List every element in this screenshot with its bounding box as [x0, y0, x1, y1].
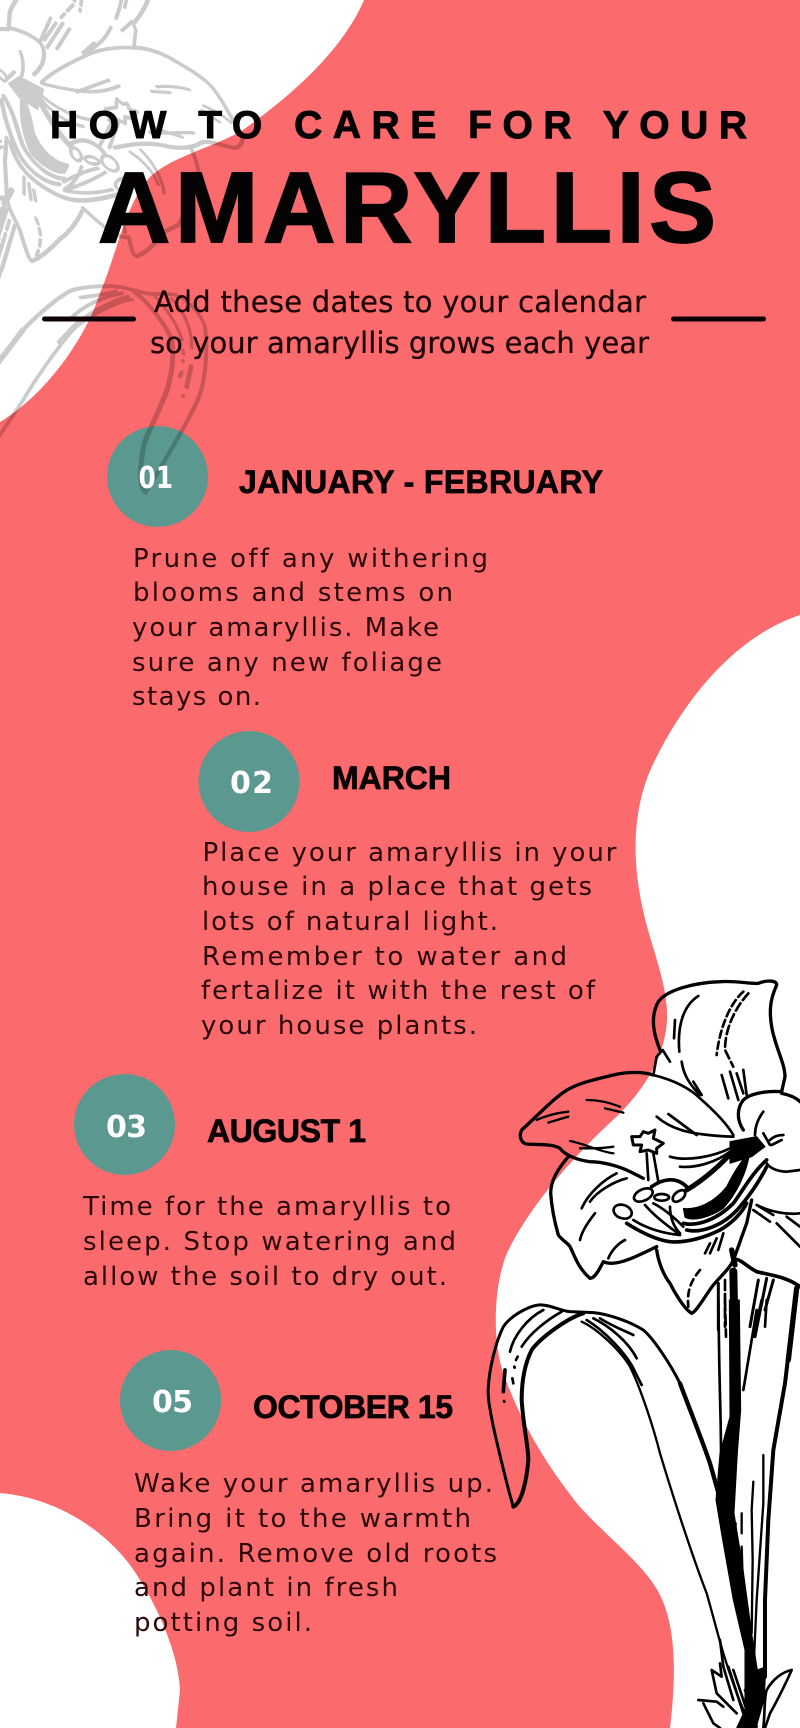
step 03 body: sleep. Stop watering and: [83, 1227, 456, 1257]
step 02 body: fertalize it with the rest of: [201, 976, 596, 1006]
step 03 number: 03: [106, 1110, 147, 1145]
subtitle: so your amaryllis grows each year: [150, 326, 649, 360]
subtitle rule right: [671, 316, 766, 322]
step 02 body: your house plants.: [201, 1011, 477, 1041]
step 05 badge circle: [120, 1350, 221, 1451]
step 01 badge circle: [107, 426, 208, 527]
white blob: right side: [496, 615, 800, 1728]
step 01 body: stays on.: [132, 682, 261, 712]
subtitle: Add these dates to your calendar: [154, 285, 646, 319]
step 01 body: [132, 544, 488, 712]
step 01 heading: JANUARY - FEBRUARY: [239, 464, 603, 500]
white blob: bottom left: [0, 1493, 180, 1728]
step 02 body: Remember to water and: [202, 942, 567, 972]
step 05 heading: OCTOBER 15: [253, 1389, 453, 1425]
step 02 number: 02: [230, 766, 273, 801]
subtitle: [150, 285, 649, 360]
step 05 body: Bring it to the warmth: [134, 1504, 471, 1534]
step 02 body: lots of natural light.: [202, 907, 498, 937]
icon: faded amaryllis line drawing, top left: [0, 0, 316, 708]
step 03 body: allow the soil to dry out.: [83, 1262, 447, 1292]
icon: amaryllis line drawing, lower right: [488, 981, 800, 1728]
subtitle rule left: [42, 316, 136, 322]
step 05 body: [134, 1469, 497, 1638]
step 03 body: Time for the amaryllis to: [82, 1192, 451, 1222]
step 05 number: 05: [152, 1385, 193, 1420]
step 05 body: again. Remove old roots: [134, 1539, 497, 1569]
step 03 badge circle: [74, 1074, 175, 1175]
step 02 badge circle: [198, 731, 300, 832]
step 05 body: potting soil.: [134, 1608, 312, 1638]
step 01 body: sure any new foliage: [132, 648, 442, 678]
step 05 body: Wake your amaryllis up.: [134, 1469, 493, 1499]
title: how to care for your: HOW TO CARE FOR YOUR: [50, 104, 747, 147]
step 02 body: [201, 838, 617, 1041]
step 01 body: blooms and stems on: [133, 578, 453, 608]
title: amaryllis: AMARYLLIS: [98, 152, 716, 264]
step 05 body: and plant in fresh: [134, 1573, 398, 1603]
step 01 body: your amaryllis. Make: [132, 613, 439, 643]
white blob: top left: [0, 0, 364, 422]
step 01 body: Prune off any withering: [133, 544, 488, 574]
step 03 body: [82, 1192, 456, 1292]
step 02 heading: MARCH: [332, 760, 451, 796]
step 02 body: Place your amaryllis in your: [202, 838, 617, 868]
step 01 number: 01: [138, 461, 173, 496]
step 02 body: house in a place that gets: [202, 872, 592, 902]
step 03 heading: AUGUST 1: [207, 1113, 366, 1149]
